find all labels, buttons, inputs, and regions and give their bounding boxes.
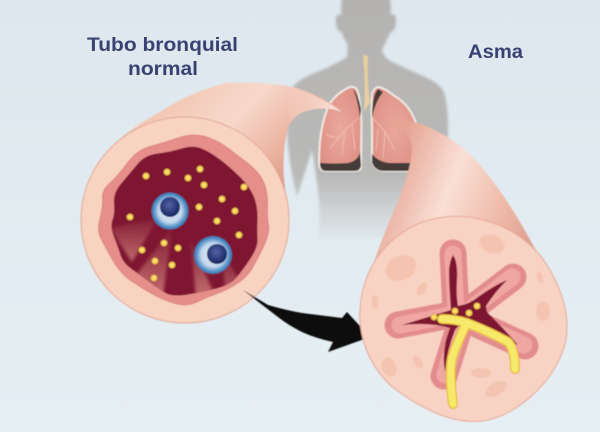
right lung [372,87,418,171]
yellow particles [430,302,480,320]
outer wall [360,216,567,422]
arrow [243,290,370,352]
lungs [319,87,418,171]
illustration [81,0,567,422]
heading: normal line 2: normal [128,59,198,80]
heading: normal: Tubo bronquial [87,35,238,56]
inner wall [98,135,269,305]
infographic: bronchial tube normal vs asthma [80,0,568,422]
yellow mucus outline [442,319,515,404]
narrowed lumen [402,255,518,372]
mucus cells [152,192,232,274]
tube body [113,83,342,250]
star-shaped inflamed wall [398,253,525,376]
heading: asthma: Asma [468,42,523,63]
asthma bronchial tube [360,120,567,422]
yellow particles [126,166,248,282]
trachea [363,55,370,112]
tissue blotches [372,231,550,400]
lumen [112,147,258,296]
tube body [360,120,567,320]
left lung [319,87,362,171]
outer wall [81,117,289,323]
yellow mucus [442,319,515,404]
normal bronchial tube [81,83,342,323]
lumen light streaks [110,218,240,296]
tube tip highlight [285,86,342,122]
inner lining [400,254,524,375]
human body silhouette [287,0,448,238]
